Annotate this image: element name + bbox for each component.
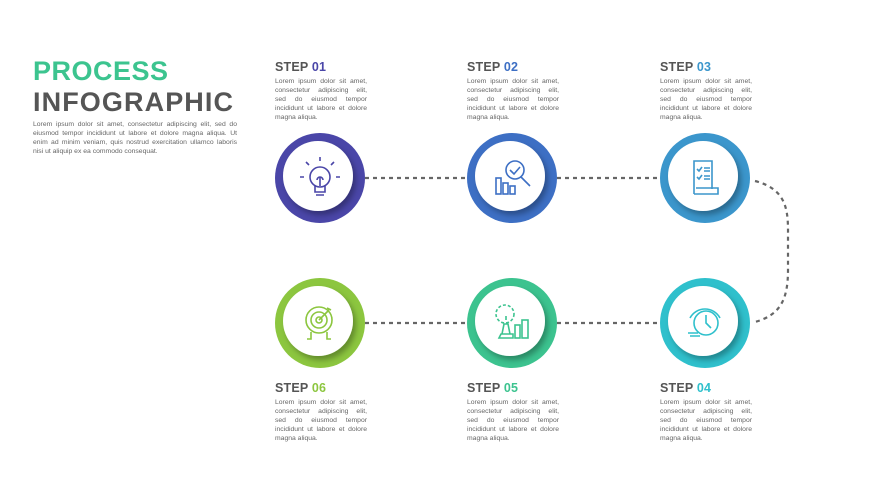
icon: step 6 target circle xyxy=(275,278,365,368)
step 01: STEP 01 xyxy=(275,60,326,74)
title xyxy=(33,56,234,117)
intro text: nisi ut aliquip ex ea commodo consequat. xyxy=(33,148,158,155)
icon: step 4 clock circle xyxy=(660,278,750,368)
step 01: incididunt ut labore et dolore xyxy=(275,105,367,112)
step 01 xyxy=(275,60,367,121)
step 03: incididunt ut labore et dolore xyxy=(660,105,752,112)
intro text: enim ad minim veniam, quis nostrud exercitation ullamco laboris xyxy=(33,139,237,146)
step 04: sed do eiusmod tempor xyxy=(660,417,752,424)
step 02 xyxy=(467,60,559,121)
step 06: magna aliqua. xyxy=(275,435,318,442)
step 01: magna aliqua. xyxy=(275,114,318,121)
step 04: STEP 04 xyxy=(660,381,711,395)
step 02: Lorem ipsum dolor sit amet, xyxy=(467,78,559,85)
intro text: eiusmod tempor incididunt ut labore et dolore magna aliqua. Ut xyxy=(33,130,237,137)
step 03: STEP 03 xyxy=(660,60,711,74)
intro text xyxy=(33,121,237,155)
step 03: magna aliqua. xyxy=(660,114,703,121)
step 06: sed do eiusmod tempor xyxy=(275,417,367,424)
icon: step 5 strategy circle xyxy=(467,278,557,368)
icon: step 3 checklist circle xyxy=(660,133,750,223)
step 01: consectetur adipiscing elit, xyxy=(275,87,367,94)
step 03 xyxy=(660,60,752,121)
step 03: Lorem ipsum dolor sit amet, xyxy=(660,78,752,85)
step 02: consectetur adipiscing elit, xyxy=(467,87,559,94)
step 02: incididunt ut labore et dolore xyxy=(467,105,559,112)
step 05: magna aliqua. xyxy=(467,435,510,442)
step 05: sed do eiusmod tempor xyxy=(467,417,559,424)
step 06 xyxy=(275,381,367,442)
step 05: Lorem ipsum dolor sit amet, xyxy=(467,399,559,406)
step 05: STEP 05 xyxy=(467,381,518,395)
step 02: STEP 02 xyxy=(467,60,518,74)
step 04: incididunt ut labore et dolore xyxy=(660,426,752,433)
step 04: Lorem ipsum dolor sit amet, xyxy=(660,399,752,406)
intro text: Lorem ipsum dolor sit amet, consectetur adipiscing elit, sed do xyxy=(33,121,237,128)
step 03: sed do eiusmod tempor xyxy=(660,96,752,103)
step 02: sed do eiusmod tempor xyxy=(467,96,559,103)
title: INFOGRAPHIC xyxy=(33,87,234,117)
title: PROCESS xyxy=(33,56,169,86)
step 05: incididunt ut labore et dolore xyxy=(467,426,559,433)
step 06: incididunt ut labore et dolore xyxy=(275,426,367,433)
icon: step 1 bulb circle xyxy=(275,133,365,223)
step 04: magna aliqua. xyxy=(660,435,703,442)
icon: step 2 chart magnifier circle xyxy=(467,133,557,223)
step 06: consectetur adipiscing elit, xyxy=(275,408,367,415)
step 04 xyxy=(660,381,752,442)
step 02: magna aliqua. xyxy=(467,114,510,121)
step 01: Lorem ipsum dolor sit amet, xyxy=(275,78,367,85)
step 05 xyxy=(467,381,559,442)
step 04: consectetur adipiscing elit, xyxy=(660,408,752,415)
step 01: sed do eiusmod tempor xyxy=(275,96,367,103)
step 06: Lorem ipsum dolor sit amet, xyxy=(275,399,367,406)
step 05: consectetur adipiscing elit, xyxy=(467,408,559,415)
step 03: consectetur adipiscing elit, xyxy=(660,87,752,94)
step 06: STEP 06 xyxy=(275,381,326,395)
